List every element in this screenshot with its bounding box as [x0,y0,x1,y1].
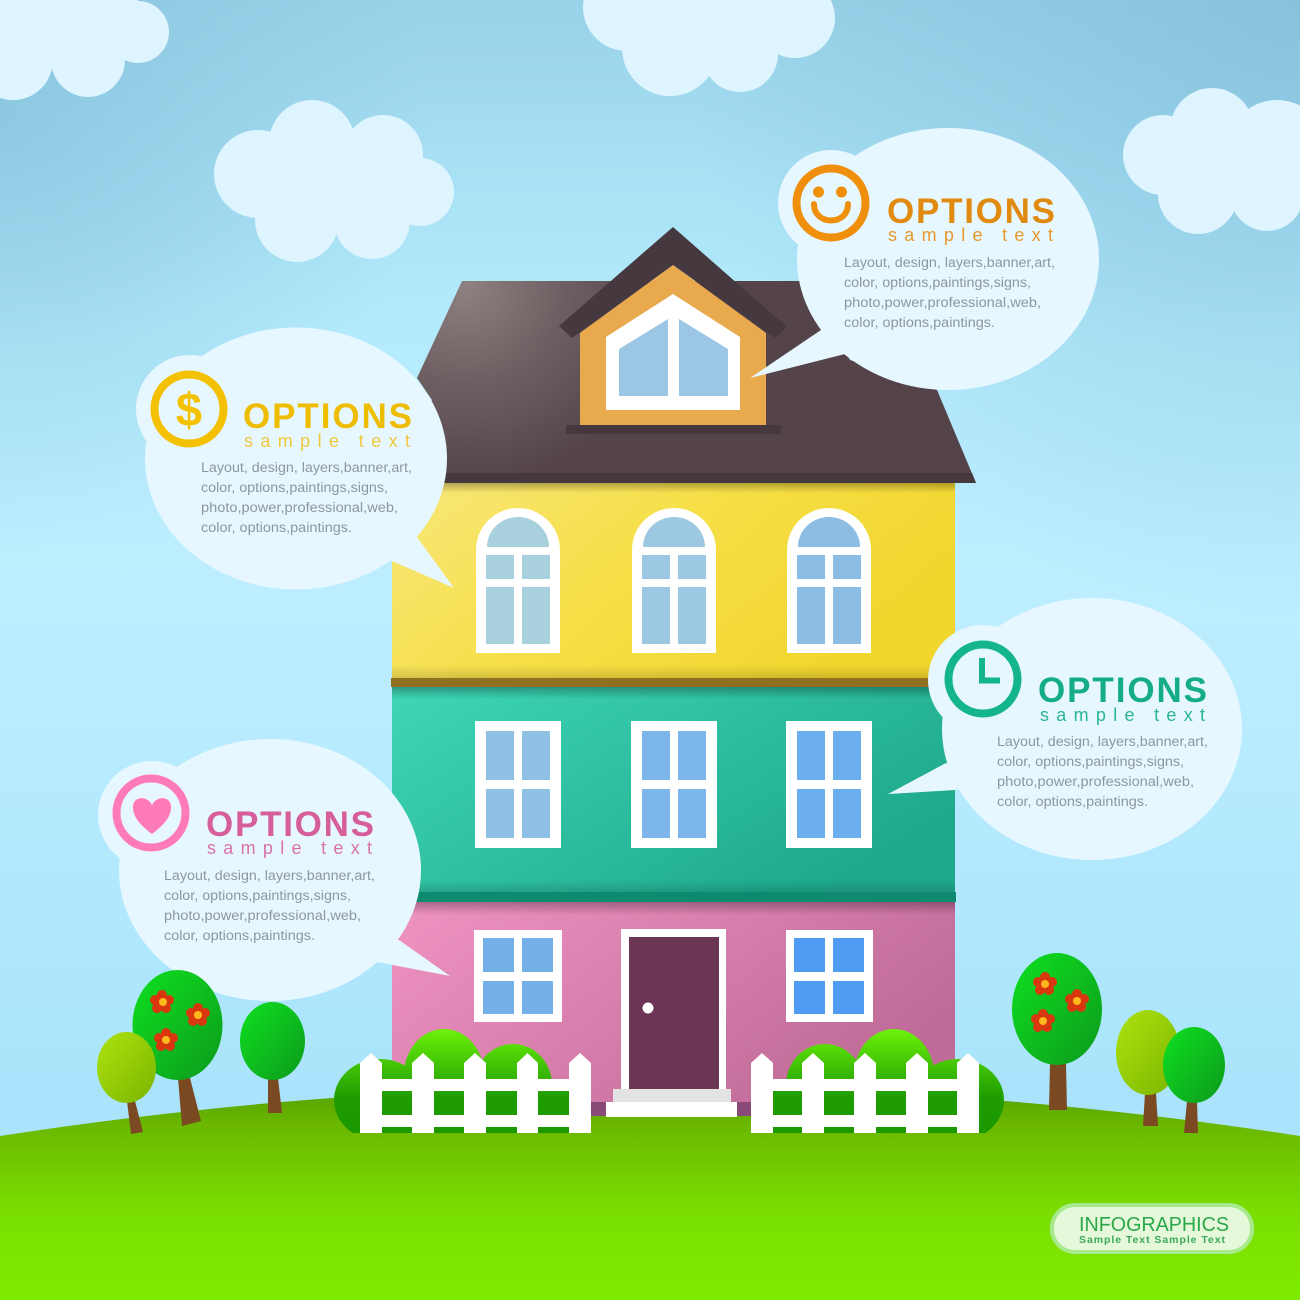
callout: clock options [888,598,1242,860]
tree: large with flowers [1012,953,1102,1110]
cloud: top left [0,0,169,100]
body text: color, options,paintings,signs, [164,888,351,903]
body text: color, options,paintings,signs, [201,480,388,495]
window left [474,930,562,1022]
body text: color, options,paintings. [997,794,1148,809]
subheading: sample text [244,431,410,451]
body text: color, options,paintings. [201,520,352,535]
dormer wall [580,265,766,425]
body text [164,868,375,943]
heading: OPTIONS [887,192,1055,231]
bushes left [334,1029,569,1141]
bushes right [773,1029,1004,1141]
bubble shape [750,128,1099,390]
trees left [97,970,305,1134]
badge: infographics [1052,1205,1252,1252]
third floor: yellow [391,483,956,687]
bubble shape [136,328,454,590]
window right [786,930,873,1022]
dormer window [606,294,740,410]
body text: color, options,paintings. [844,315,995,330]
body text: photo,power,professional,web, [164,908,361,923]
body text: Layout, design, layers,banner,art, [201,460,412,475]
cloud: top centre [583,0,835,96]
callout: heart options [98,739,450,1001]
ground floor: pink [392,902,955,1117]
body text: Layout, design, layers,banner,art, [844,255,1055,270]
body text: photo,power,professional,web, [997,774,1194,789]
dormer [559,227,787,434]
cloud: top right [1123,88,1300,234]
heading: OPTIONS [243,397,412,436]
icon: dollar coin: $ [176,383,202,436]
body text: photo,power,professional,web, [844,295,1041,310]
fence left [360,1053,591,1133]
window 1 [475,721,561,848]
bubble shape [98,739,450,1001]
door [621,929,726,1091]
subheading: sample text [207,838,372,858]
fence right [751,1053,979,1133]
tree: small lime [97,1032,156,1134]
tree: medium [1163,1027,1225,1133]
callout: smile options [750,128,1099,390]
body text: Layout, design, layers,banner,art, [164,868,375,883]
arched window 3 [787,508,871,653]
window 2 [631,721,717,848]
body text [201,460,412,535]
body text: Layout, design, layers,banner,art, [997,734,1208,749]
arched window 2 [632,508,716,653]
tree: small lime [1116,1010,1180,1126]
trees right [1012,953,1225,1133]
body text [844,255,1055,330]
roof [390,281,976,483]
hill [0,1086,1300,1300]
icon: heart [116,778,186,848]
dormer ledge [566,425,781,434]
tree: medium [240,1002,305,1113]
body text: color, options,paintings. [164,928,315,943]
body text [997,734,1208,809]
body text: photo,power,professional,web, [201,500,398,515]
subheading: sample text [888,225,1053,245]
heading: OPTIONS [1038,671,1207,710]
badge subtitle: Sample Text Sample Text [1079,1234,1226,1246]
icon: clock [948,644,1018,714]
steps [606,1089,737,1117]
icon: smiley [796,168,866,238]
badge title: INFOGRAPHICS [1079,1214,1229,1236]
dormer roof [559,227,787,338]
body text: color, options,paintings,signs, [997,754,1184,769]
icon: dollar coin [154,374,224,444]
arched window 1 [476,508,560,653]
callout: dollar options [136,328,454,590]
heading: OPTIONS [206,805,374,844]
subheading: sample text [1040,705,1205,725]
bubble shape [888,598,1242,860]
house [390,227,976,1117]
body text: color, options,paintings,signs, [844,275,1031,290]
tree: large with flowers [132,970,222,1126]
second floor: teal [391,687,956,902]
cloud: middle left [214,100,454,262]
window 3 [786,721,872,848]
